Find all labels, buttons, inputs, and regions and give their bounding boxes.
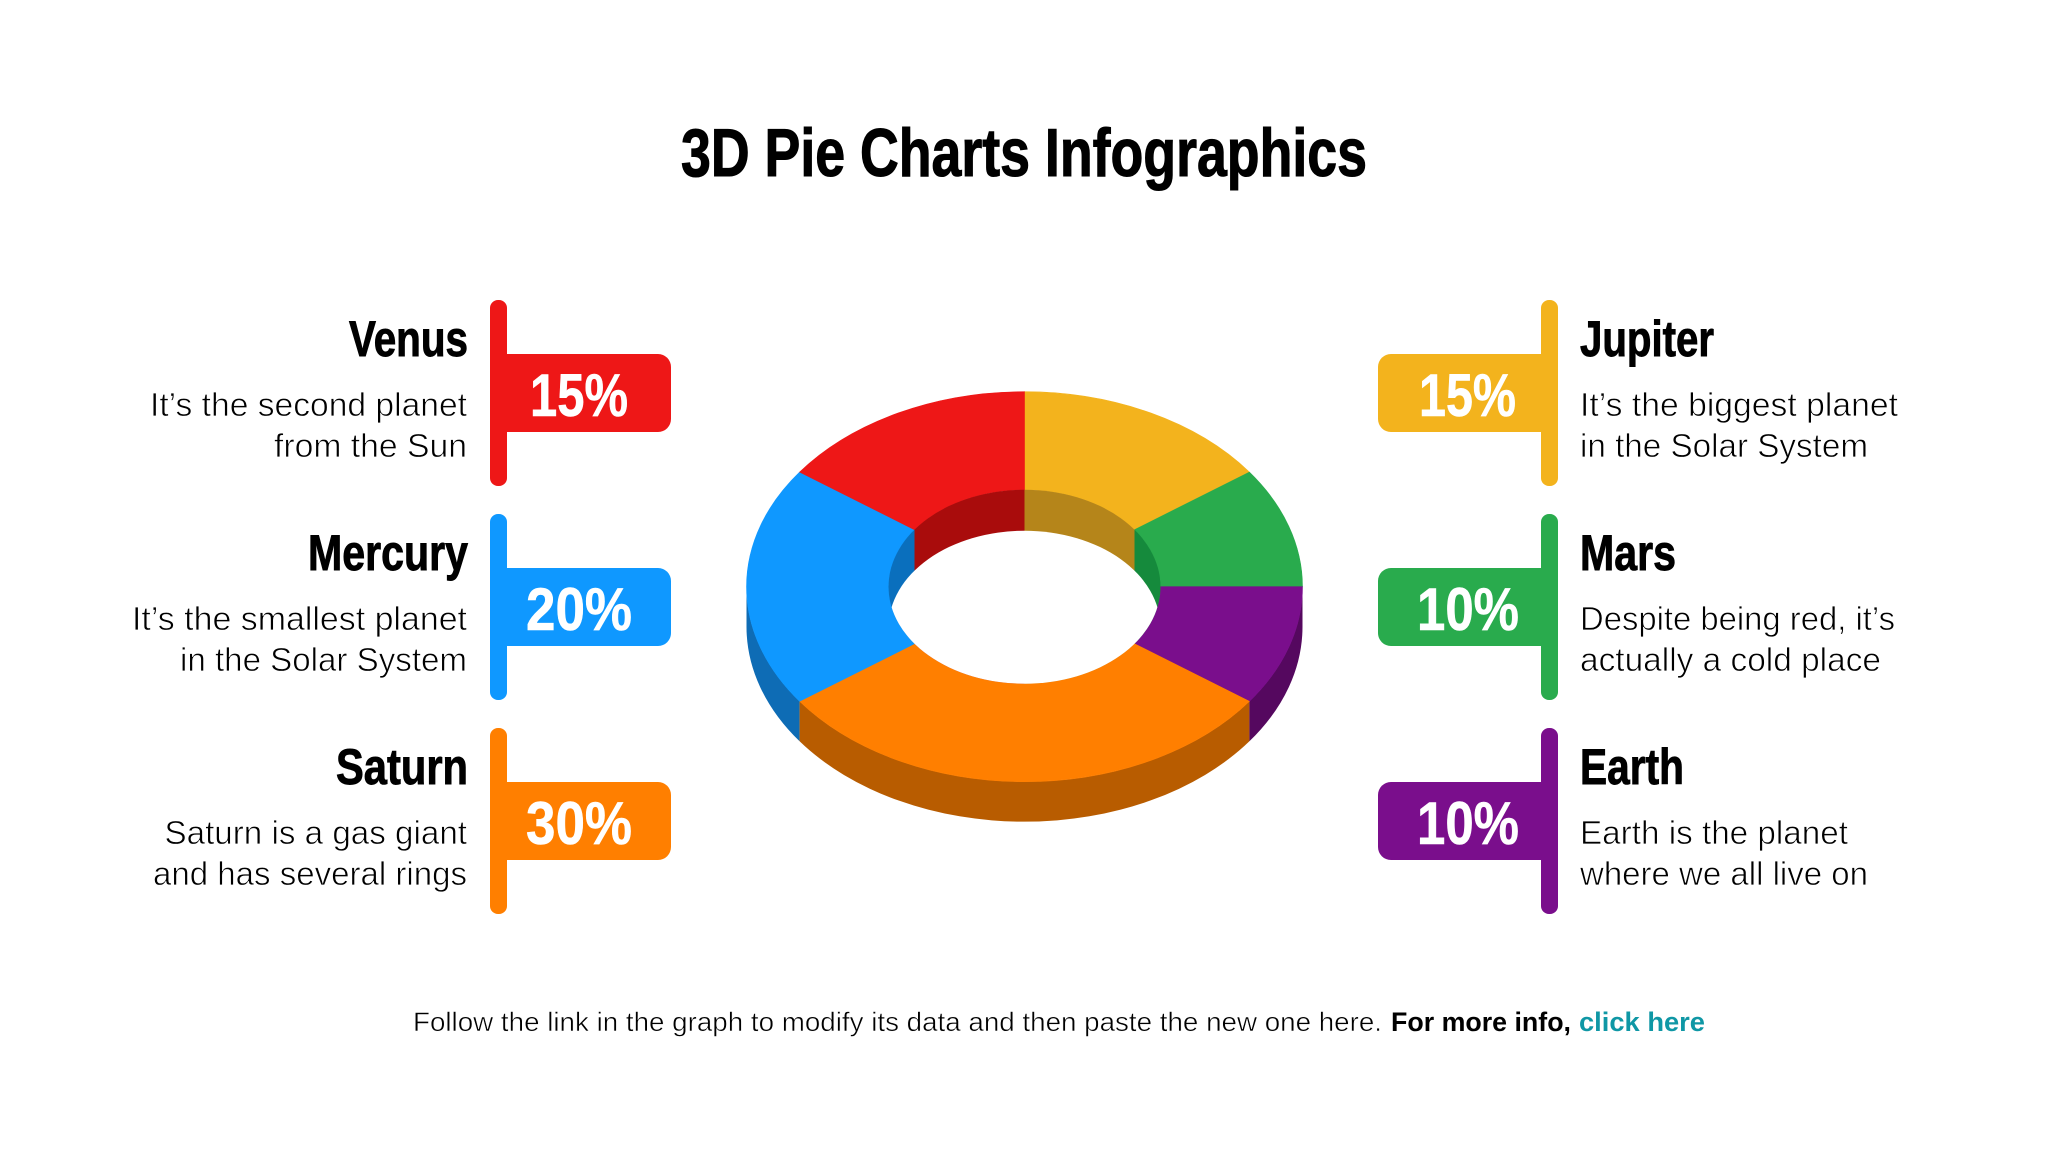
description: Jupiter: in the Solar System [1580,427,1868,464]
flag: Earth 10% [1378,728,1558,914]
description: Venus: It’s the second planet [150,386,467,423]
panel: Mercury [132,514,671,700]
flag: Saturn 30% [490,728,671,914]
description: Mars: actually a cold place [1580,641,1881,678]
heading: Mars: Mars [1580,525,1676,581]
heading: Earth: Earth [1580,739,1684,795]
heading: Jupiter: Jupiter [1580,311,1714,367]
flag: Mercury 20%: 20% [526,576,632,643]
description: Saturn [153,814,467,892]
top ring slices [747,392,1302,782]
footer note: For more info, [1391,1007,1571,1037]
panel: Saturn [153,728,671,914]
flag: Earth 10%: 10% [1417,790,1519,857]
description: Saturn: Saturn is a gas giant [164,814,467,851]
description: Mars: Despite being red, it’s [1580,600,1895,637]
chart: 3D donut pie chart [746,392,1302,822]
description: Earth [1579,814,1868,892]
flag: Mars 10%: 10% [1417,576,1519,643]
heading: Saturn: Saturn [336,739,468,795]
panel: Mars [1378,514,1895,700]
flag: Saturn 30%: 30% [526,790,632,857]
description: Venus: from the Sun [274,427,467,464]
heading: Mercury: Mercury [308,525,468,581]
description: Mercury: in the Solar System [180,641,467,678]
flag: Jupiter 15%: 15% [1419,362,1516,429]
inner hole walls [888,490,1160,684]
flag: Venus 15% [490,300,671,486]
flag: Mars 10% [1378,514,1558,700]
description: Earth: where we all live on [1579,855,1868,892]
panel: Jupiter [1378,300,1898,486]
footer note: Follow the link in the graph to modify its data and then paste the new one here. [413,1007,1382,1037]
description: Mercury [132,600,467,678]
description: Jupiter: It’s the biggest planet [1580,386,1898,423]
description: Earth: Earth is the planet [1580,814,1848,851]
flag: Mercury 20% [490,514,671,700]
panel: Venus [150,300,671,486]
panel: Earth [1378,728,1868,914]
description: Jupiter [1580,386,1898,464]
heading: Venus: Venus [349,311,468,367]
outer side walls [746,587,1302,822]
description: Mars [1580,600,1895,678]
title: 3D Pie Charts Infographics [681,115,1367,191]
footer note: click here [1579,1007,1705,1037]
description: Saturn: and has several rings [153,855,467,892]
flag: Jupiter 15% [1378,300,1558,486]
description: Venus [150,386,467,464]
flag: Venus 15%: 15% [530,362,628,429]
description: Mercury: It’s the smallest planet [132,600,467,637]
